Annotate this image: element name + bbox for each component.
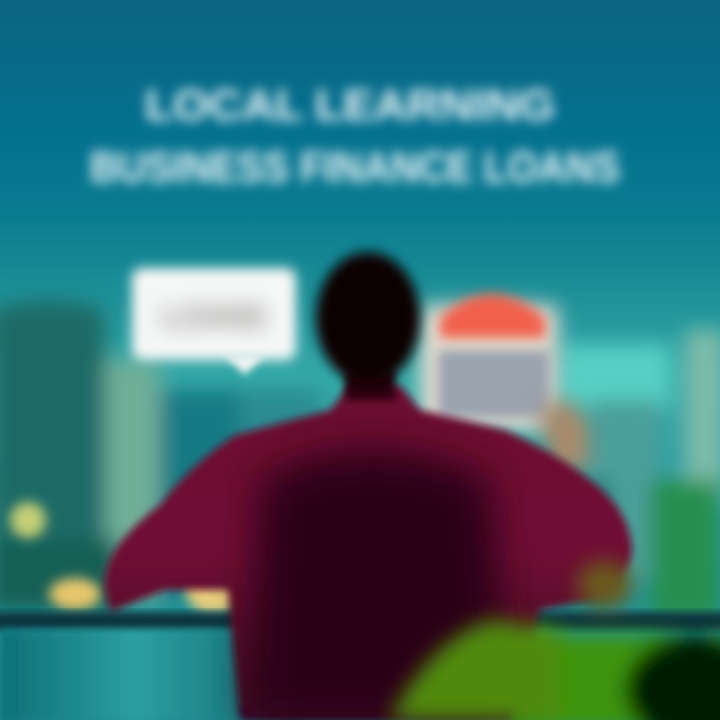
bubble text: LOANS	[162, 298, 266, 336]
speech bubble	[132, 268, 296, 375]
calendar card	[420, 294, 558, 430]
head	[316, 252, 420, 384]
neck	[345, 370, 395, 400]
foliage over shirt	[390, 620, 560, 720]
elbow foliage shadow	[577, 561, 633, 609]
title: LOCAL LEARNING	[145, 81, 555, 130]
raised hand	[540, 401, 590, 470]
title: BUSINESS FINANCE LOANS	[90, 143, 620, 192]
foreground foliage	[490, 635, 720, 720]
man from behind	[105, 252, 633, 720]
shirt	[105, 385, 632, 720]
title	[90, 81, 620, 192]
city skyline	[0, 300, 720, 620]
shirt shadow	[250, 450, 510, 720]
waterfront	[0, 612, 720, 630]
window lights	[10, 502, 245, 614]
